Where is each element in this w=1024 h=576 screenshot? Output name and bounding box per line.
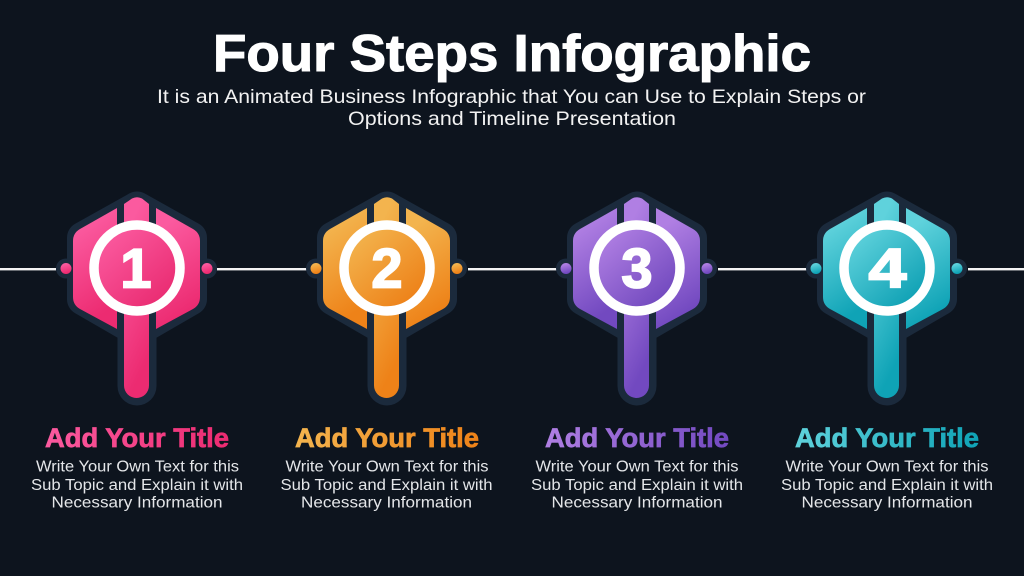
step 2 dark outline	[306, 200, 467, 406]
timeline connector	[0, 268, 1024, 270]
step 1 stem	[124, 197, 149, 398]
step 2 body	[280, 458, 492, 512]
step 1 body: Sub Topic and Explain it with	[31, 477, 243, 494]
step 4 dark outline	[806, 200, 967, 406]
step 1 marker	[56, 197, 217, 406]
step 1 body: Write Your Own Text for this	[36, 458, 239, 476]
step 3 body: Sub Topic and Explain it with	[531, 477, 743, 494]
step 1 number: 1	[120, 236, 152, 300]
step 2 text	[280, 423, 492, 512]
step 2 ring	[344, 225, 430, 311]
step 4 body: Write Your Own Text for this	[786, 458, 989, 476]
step 3 text	[531, 423, 743, 512]
step 3 body: Write Your Own Text for this	[536, 458, 739, 476]
step 1 body: Necessary Information	[52, 494, 222, 512]
step 3 marker	[556, 197, 717, 406]
step 1 text	[31, 423, 243, 512]
subtitle: It is an Animated Business Infographic that You can Use to Explain Steps or	[157, 86, 867, 108]
step 3 side dots	[560, 263, 712, 274]
step 2 heading: Add Your Title	[295, 423, 479, 453]
step 4 body: Necessary Information	[802, 494, 972, 512]
subtitle: Options and Timeline Presentation	[348, 108, 676, 130]
step 3 number: 3	[621, 236, 653, 300]
step 3 stem	[624, 197, 649, 398]
step 4 number: 4	[868, 236, 906, 300]
step 2 side dots	[310, 263, 462, 274]
step 1 side dots	[60, 263, 212, 274]
step 1 ring	[94, 225, 180, 311]
step 1 heading: Add Your Title	[45, 423, 229, 453]
step 3 hexagon panels	[573, 208, 700, 329]
step 4 body	[781, 458, 993, 512]
step 4 heading: Add Your Title	[795, 423, 979, 453]
step 1 dark outline	[56, 200, 217, 406]
step 2 stem	[374, 197, 399, 398]
step 4 hexagon panels	[823, 208, 950, 329]
subtitle	[157, 86, 867, 130]
step 2 body: Sub Topic and Explain it with	[280, 477, 492, 494]
step 4 marker	[806, 197, 967, 406]
step 3 body: Necessary Information	[552, 494, 722, 512]
step 2 body: Write Your Own Text for this	[286, 458, 489, 476]
step 4 body: Sub Topic and Explain it with	[781, 477, 993, 494]
step 4 side dots	[810, 263, 962, 274]
step 4 ring	[844, 225, 930, 311]
step 3 heading: Add Your Title	[545, 423, 729, 453]
step 4 stem	[874, 197, 899, 398]
step 2 number: 2	[371, 236, 403, 300]
step 3 ring	[594, 225, 680, 311]
step 3 dark outline	[556, 200, 717, 406]
step 3 body	[531, 458, 743, 512]
step 2 hexagon panels	[323, 208, 450, 329]
step 2 body: Necessary Information	[301, 494, 472, 512]
step 1 body	[31, 458, 243, 512]
step 1 hexagon panels	[73, 208, 200, 329]
step 4 text	[781, 423, 993, 512]
title: Four Steps Infographic	[213, 25, 811, 83]
step 2 marker	[306, 197, 467, 406]
